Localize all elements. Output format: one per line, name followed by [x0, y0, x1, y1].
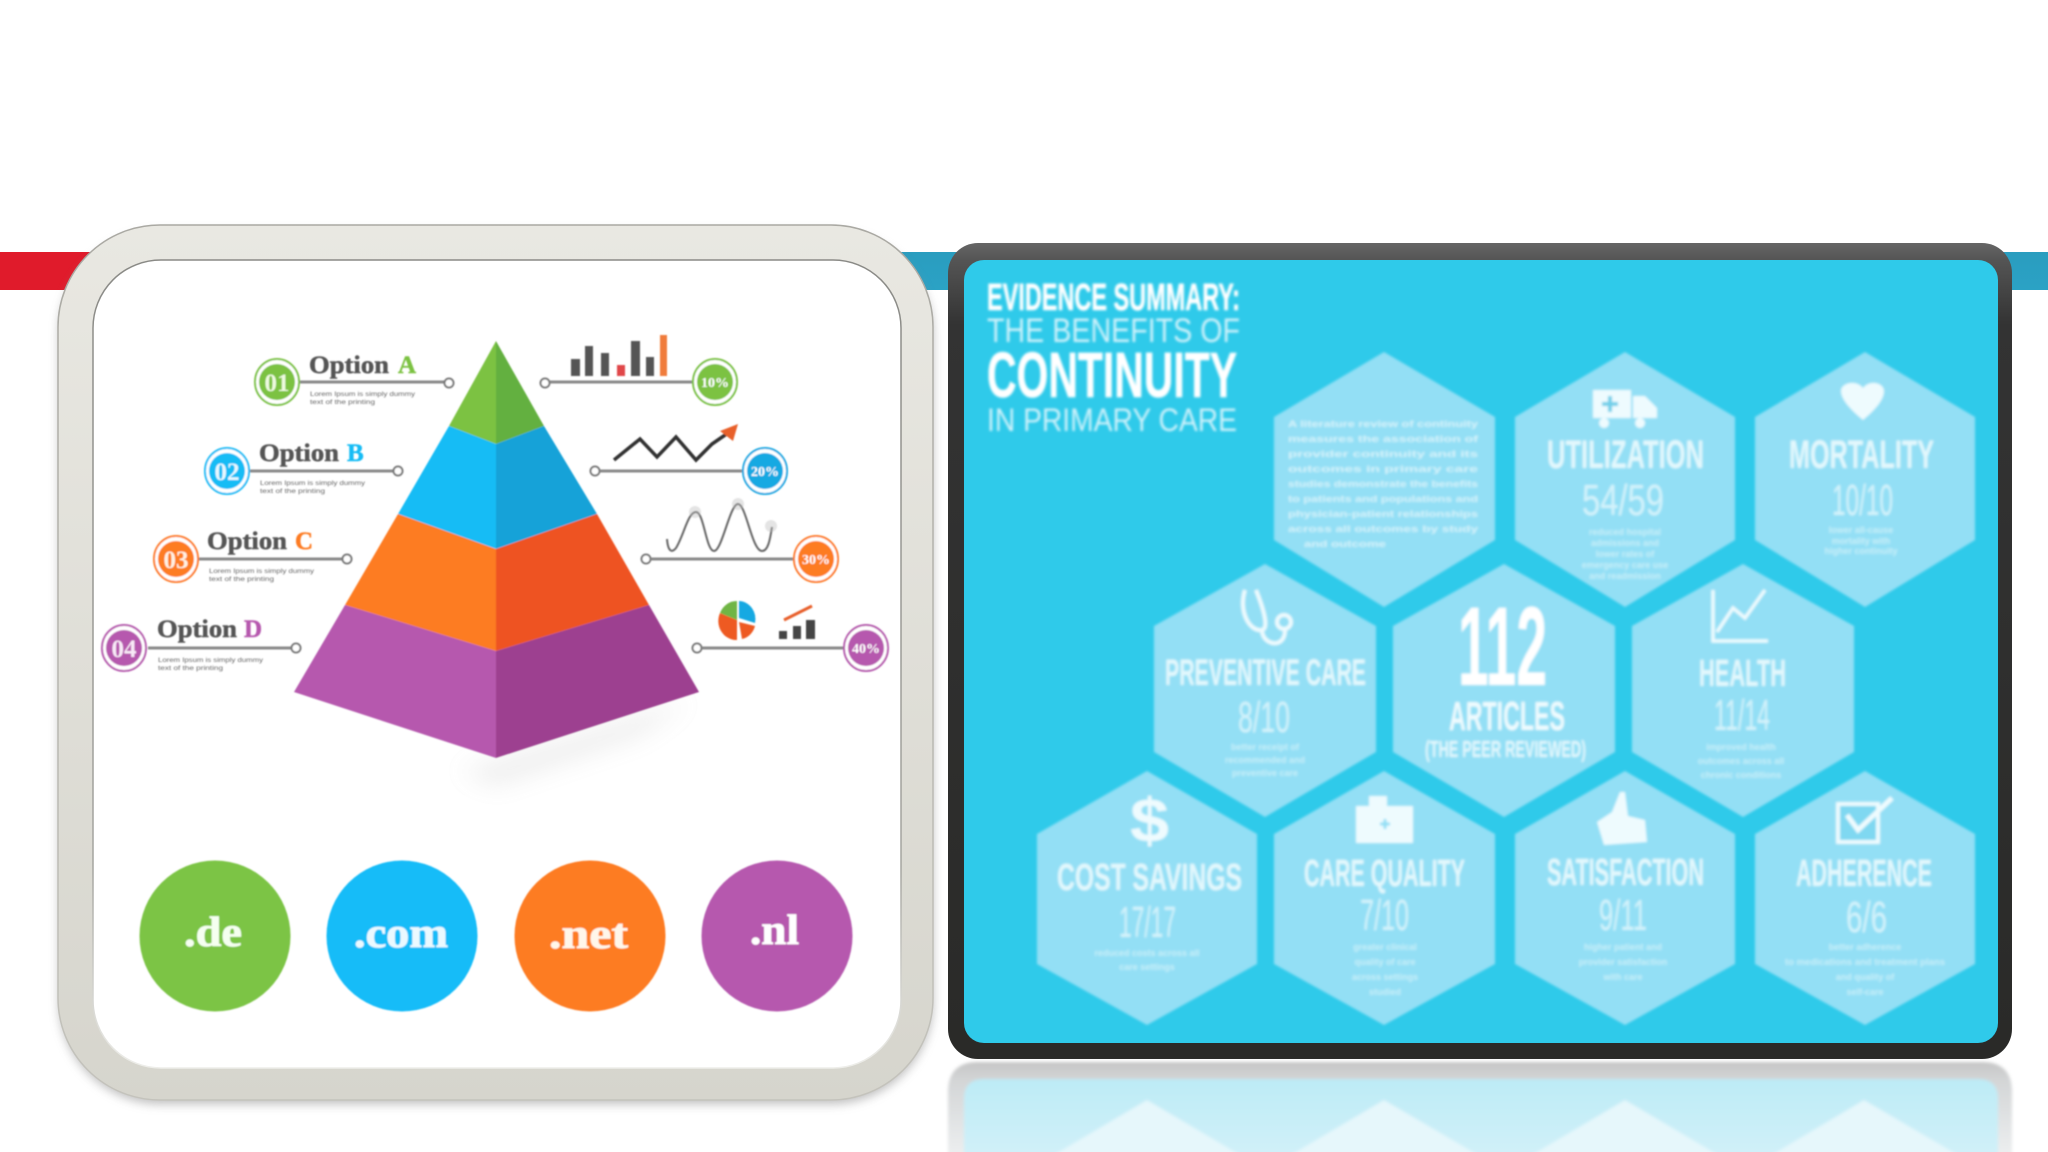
dark tablet frame [948, 243, 2012, 1059]
option B label: B [347, 440, 364, 467]
hexagon: adherence: ADHERENCE [1796, 853, 1932, 895]
hexagon: preventive care: recommended and [1225, 755, 1305, 765]
option D label: Option [157, 616, 237, 643]
hexagon: satisfaction: provider satisfaction [1579, 957, 1667, 967]
option C label: text of the printing [209, 577, 274, 583]
hexagon: adherence: to medications and treatment plans [1785, 957, 1945, 967]
hexagon: care quality: 7/10 [1360, 891, 1409, 940]
pyramid chart [294, 341, 699, 758]
right callout 20% with trend line icon: 20% [751, 465, 779, 480]
hexagon: cost savings [1037, 771, 1257, 1025]
hexagon: adherence: and quality of [1836, 972, 1895, 982]
title: THE BENEFITS OF [987, 312, 1240, 350]
white picture area [93, 260, 901, 1068]
hexagon: care quality [1274, 771, 1495, 1025]
tablet reflection [948, 1062, 2012, 1152]
hexagon: health: improved health [1706, 742, 1776, 752]
hexagon: mortality: higher continuity [1824, 546, 1898, 556]
hexagon: mortality [1755, 352, 1975, 607]
option C label [154, 528, 352, 583]
right callout 30% with wave icon: 30% [802, 553, 830, 568]
hexagon: health: HEALTH [1699, 653, 1786, 695]
domain circle .de [140, 860, 290, 1012]
hexagon: adherence: self-care [1846, 987, 1884, 997]
right callout 10% with bar chart icon: 10% [701, 376, 729, 391]
domain circle .com: .com [354, 911, 448, 957]
domain circle .nl [702, 860, 852, 1012]
option D label: Lorem Ipsum is simply dummy [158, 658, 263, 664]
hexagon: utilization: UTILIZATION [1547, 433, 1704, 477]
domain circle .net [514, 860, 666, 1012]
hexagon: cost savings: $ [1130, 787, 1169, 856]
hexagon: cost savings: 17/17 [1119, 898, 1176, 947]
hexagon: care quality: CARE QUALITY [1304, 853, 1465, 895]
hexagon: care quality: greater clinical [1353, 942, 1417, 952]
hexagon: adherence: better adherence [1829, 942, 1901, 952]
domain circle .nl: .nl [750, 908, 799, 954]
option B label: 02 [214, 459, 240, 486]
title [987, 277, 1240, 438]
hexagon: intro paragraph: and outcome [1304, 539, 1386, 549]
hexagon: 112 articles [1393, 564, 1615, 817]
hexagon: care quality: studied [1369, 987, 1401, 997]
hexagon: satisfaction: with care [1602, 972, 1643, 982]
hexagon: health [1632, 564, 1854, 817]
hexagon: intro paragraph [1274, 352, 1495, 607]
option A label: 01 [264, 370, 290, 397]
hexagon: health: 11/14 [1714, 691, 1770, 740]
pyramid shadow [460, 700, 690, 785]
hexagon: 112 articles: 112 [1458, 584, 1547, 709]
hexagon: care quality: across settings [1352, 972, 1418, 982]
title: EVIDENCE SUMMARY: [987, 277, 1240, 319]
option B label: Option [259, 440, 339, 467]
hexagon: utilization: admissions and [1591, 538, 1659, 548]
hexagon: intro paragraph: physician-patient relationships [1288, 509, 1478, 519]
option B label: text of the printing [260, 489, 325, 495]
hexagon: care quality: quality of care [1354, 957, 1416, 967]
beige picture frame [58, 225, 933, 1100]
option D label: text of the printing [158, 666, 223, 672]
hexagon: 112 articles: ARTICLES [1449, 693, 1565, 739]
option C label: C [295, 528, 313, 555]
hexagon: utilization [1515, 352, 1735, 607]
option B label [205, 440, 402, 495]
hexagon: adherence: 6/6 [1846, 893, 1887, 942]
right callout 20% with trend line icon [590, 424, 787, 494]
hexagon: intro paragraph: provider continuity and its [1288, 449, 1478, 459]
domain circle .net: .net [549, 912, 628, 958]
hexagon: utilization: emergency care use [1582, 560, 1668, 570]
hexagon: utilization: reduced hospital [1589, 527, 1661, 537]
hexagon: satisfaction: SATISFACTION [1547, 852, 1704, 894]
frame shadow [59, 232, 933, 1104]
title: IN PRIMARY CARE [987, 402, 1237, 438]
hexagon: intro paragraph: across all outcomes by study [1288, 524, 1478, 534]
hexagon: preventive care [1154, 564, 1376, 817]
red header band [0, 252, 120, 290]
hexagon: preventive care: preventive care [1232, 768, 1298, 778]
title: CONTINUITY [987, 339, 1237, 411]
hexagon: mortality: mortality with [1832, 536, 1890, 546]
hexagon: preventive care: PREVENTIVE CARE [1165, 652, 1366, 693]
option A label: Option [309, 352, 389, 379]
option D label: D [244, 616, 262, 643]
option C label: 03 [164, 547, 188, 574]
hexagon: mortality: 10/10 [1832, 476, 1893, 525]
hexagon: intro paragraph: A literature review of continuity [1288, 419, 1478, 429]
hexagon: intro paragraph: to patients and populations and [1288, 494, 1478, 504]
option B label: Lorem Ipsum is simply dummy [260, 481, 365, 487]
option A label: text of the printing [310, 400, 375, 406]
option A label [255, 352, 454, 406]
option A label: Lorem Ipsum is simply dummy [310, 392, 415, 398]
option D label: 04 [112, 636, 137, 663]
hexagon: utilization: 54/59 [1582, 476, 1664, 525]
hexagon: intro paragraph: measures the association of [1288, 434, 1480, 444]
hexagon: intro paragraph: studies demonstrate the benefits [1288, 479, 1478, 489]
hexagon: mortality: lower all-cause [1829, 525, 1893, 535]
hexagon: intro paragraph: outcomes in primary care [1288, 464, 1478, 474]
panel: pyramid infographic [58, 225, 933, 1104]
hexagon: mortality: MORTALITY [1789, 433, 1934, 477]
hexagon: preventive care: better receipt of [1231, 742, 1300, 752]
hexagon: cost savings: reduced costs across all [1094, 948, 1200, 958]
right callout 30% with wave icon [642, 498, 838, 582]
domain circle .com [326, 860, 478, 1012]
option A label: A [398, 352, 416, 379]
hexagon: utilization: and readmission [1589, 571, 1661, 581]
option C label: Lorem Ipsum is simply dummy [209, 569, 314, 575]
cyan screen [964, 260, 1998, 1043]
hexagon: utilization: lower rates of [1596, 549, 1655, 559]
hexagon: adherence [1755, 771, 1975, 1025]
panel: evidence summary [948, 243, 2012, 1059]
hexagon: satisfaction: higher patient and [1584, 942, 1662, 952]
hexagon: preventive care: 8/10 [1238, 693, 1290, 742]
hexagon: cost savings: care settings [1119, 962, 1175, 972]
right callout 10% with bar chart icon [540, 335, 737, 405]
right callout 40% with pie and bar icons: 40% [852, 642, 880, 657]
hexagon: health: outcomes across all [1698, 756, 1784, 766]
option C label: Option [207, 528, 287, 555]
hexagon: cost savings: COST SAVINGS [1057, 857, 1242, 899]
teal header band [880, 252, 2048, 290]
right callout 40% with pie and bar icons [692, 601, 888, 671]
option D label [102, 616, 300, 672]
hexagon: satisfaction: 9/11 [1599, 891, 1647, 940]
domain circle .de: .de [184, 910, 242, 956]
hexagon: satisfaction [1515, 771, 1735, 1025]
hexagon: 112 articles: (THE PEER REVIEWED) [1425, 736, 1586, 762]
hexagon: health: chronic conditions [1701, 770, 1781, 780]
